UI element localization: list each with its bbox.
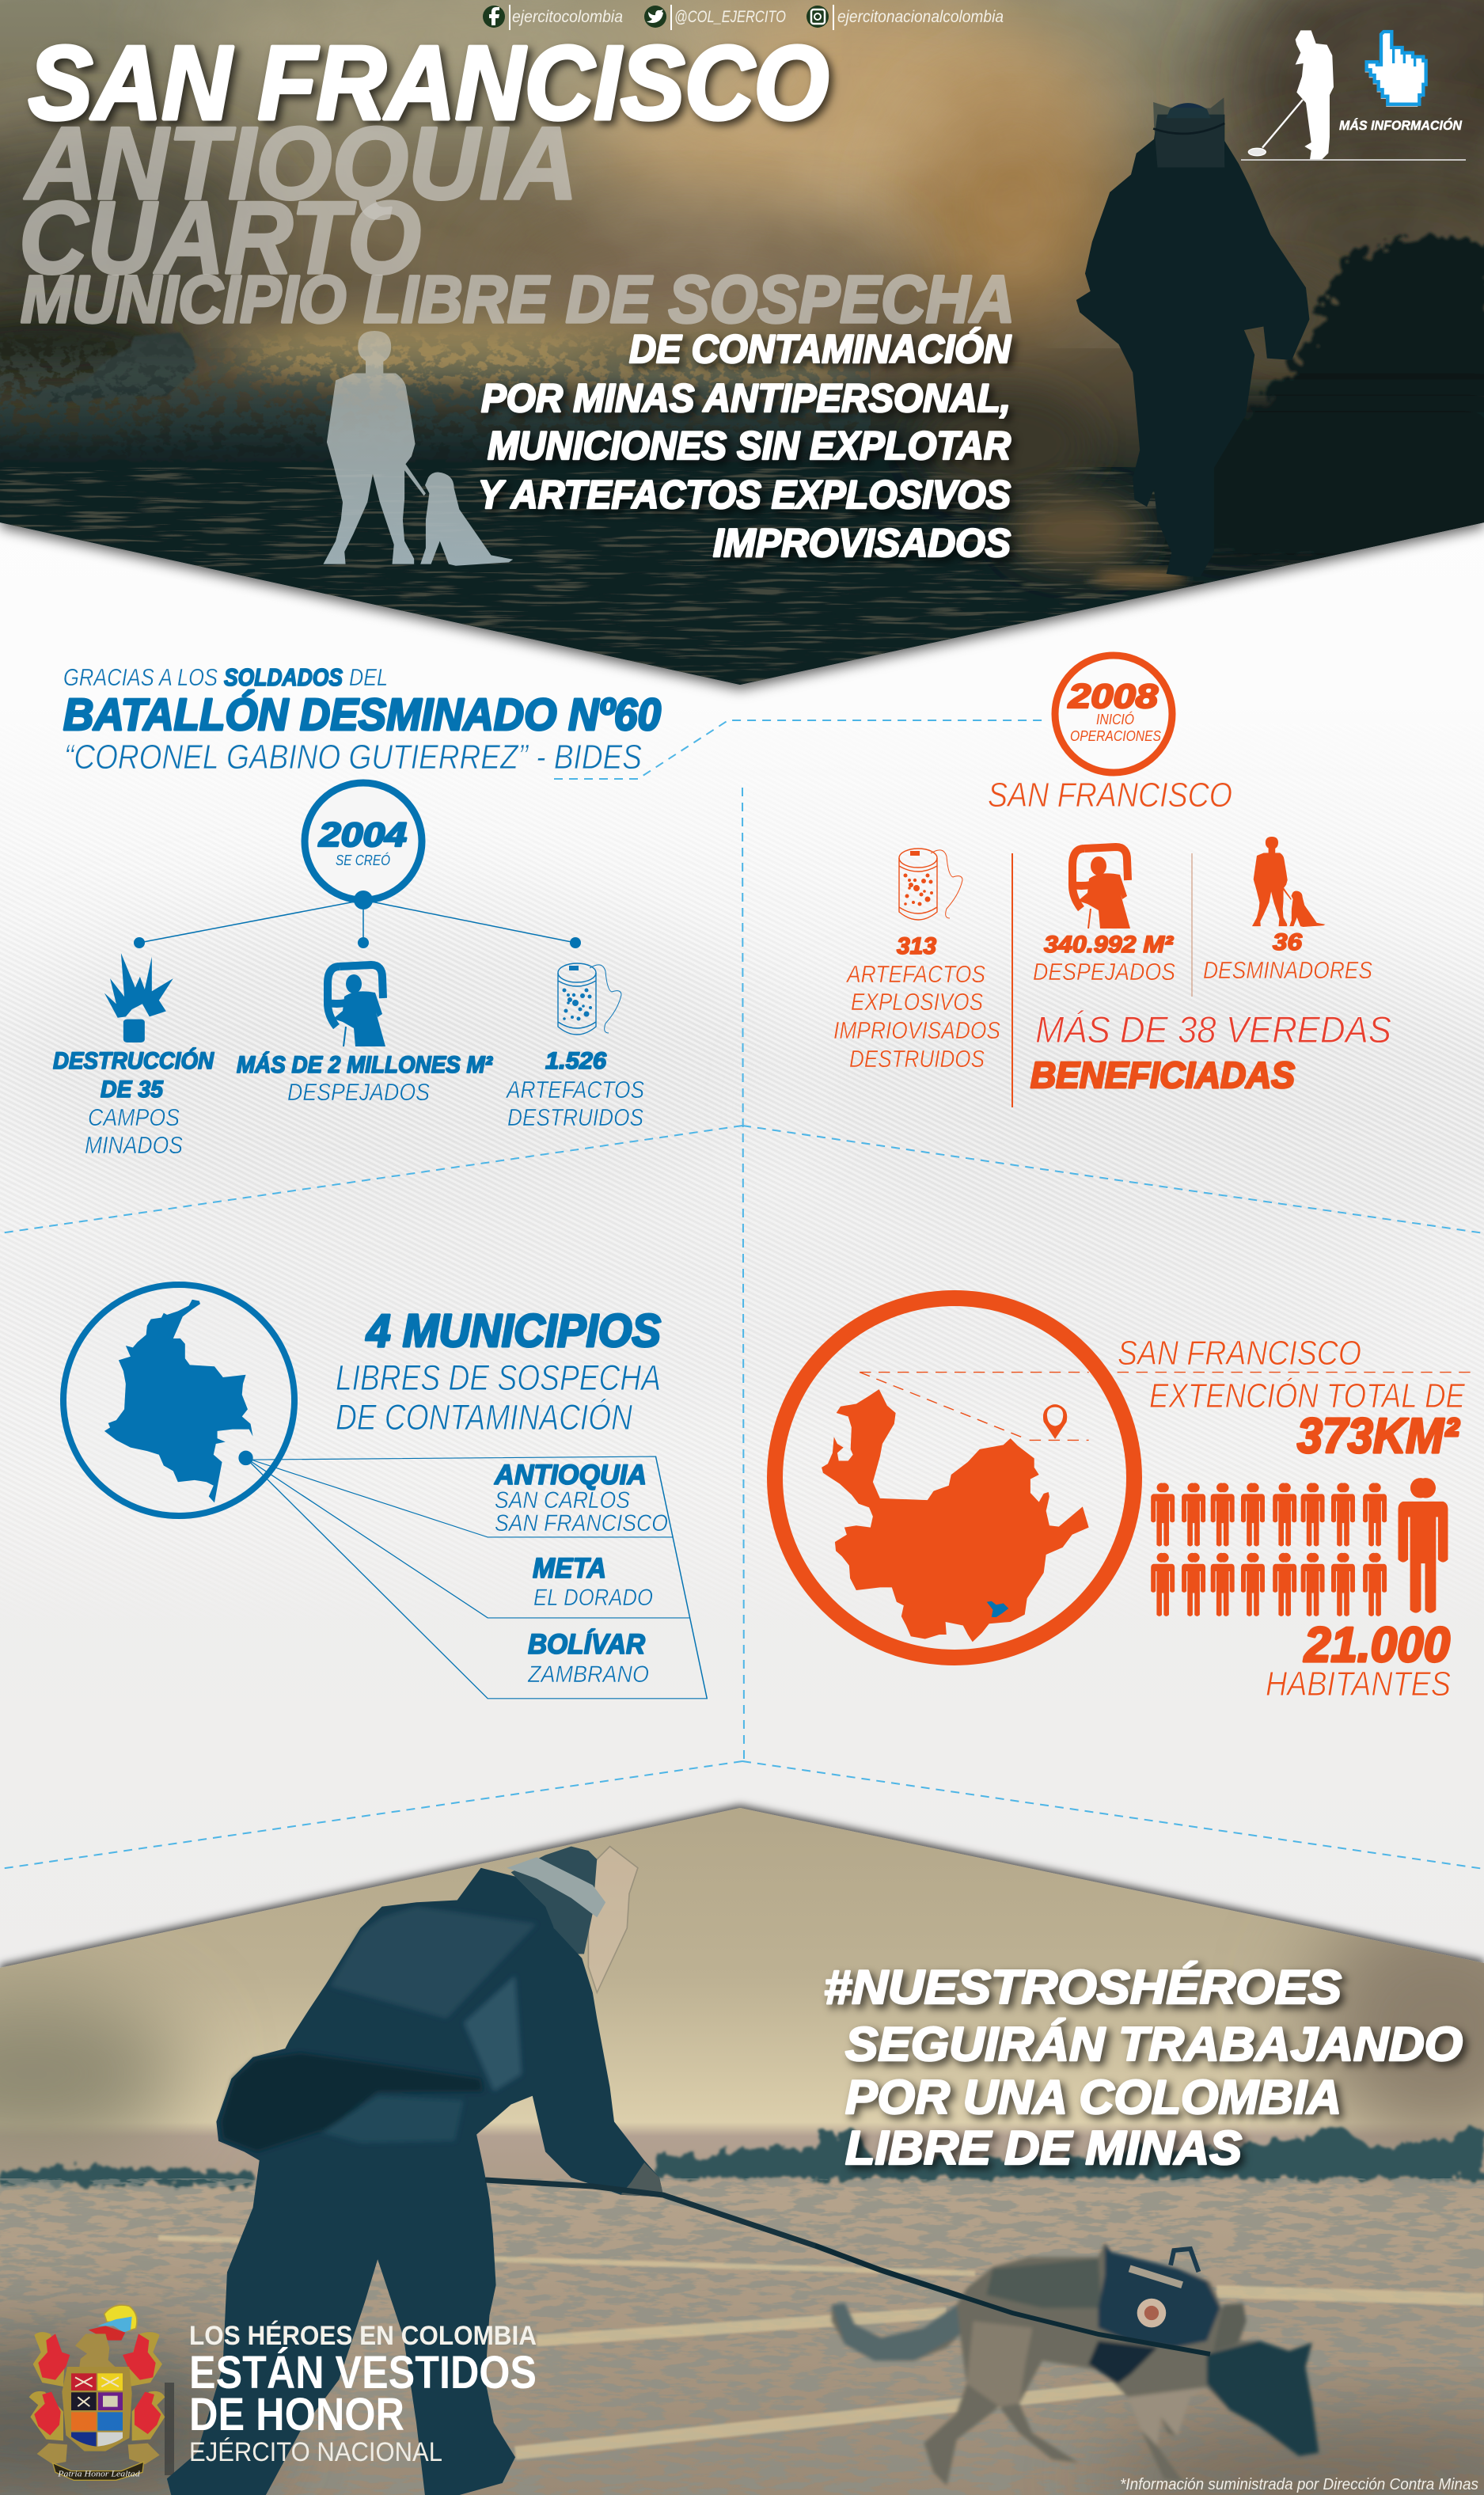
- text: extension: [1118, 1334, 1466, 1464]
- stat: 313: ARTEFACTOS: [845, 960, 985, 988]
- stat: campos minados: [53, 1047, 214, 1159]
- stat: 36: 36: [1273, 929, 1302, 955]
- panel: batallon heading: GRACIAS A LOS: [63, 663, 218, 691]
- icon: helmet man: [1072, 847, 1130, 929]
- closing message: POR UNA COLOMBIA: [845, 2071, 1342, 2124]
- mid haze around runner: [918, 388, 1092, 499]
- stat: 1.526: ARTEFACTOS: [505, 1076, 644, 1103]
- stat: dos millones: [237, 1051, 493, 1106]
- stat: dos millones: DESPEJADOS: [287, 1078, 430, 1106]
- leash over dog: [815, 2246, 1210, 2354]
- dust: [1009, 495, 1144, 566]
- list: Antioquia: [494, 1460, 668, 1536]
- grass: [0, 2178, 1484, 2495]
- map: Colombia in circle: [63, 1285, 294, 1516]
- subtitle block: [478, 327, 1011, 565]
- panel: bottom photo: [0, 1805, 1484, 2495]
- tank: [30, 332, 196, 403]
- icon: twitter: [644, 5, 672, 30]
- closing message: [824, 1961, 1463, 2174]
- crest ribbons: [37, 2444, 160, 2464]
- sunlit haze behind bushes: [230, 321, 657, 384]
- deminer silhouette: [1076, 97, 1309, 577]
- heading: san francisco: SAN FRANCISCO: [988, 776, 1232, 815]
- panel: batallon heading: BATALLÓN DESMINADO Nº60: [63, 689, 661, 740]
- main title: SAN FRANCISCO: [28, 25, 829, 141]
- callout: veredas: [1030, 1008, 1391, 1096]
- stat: 313: DESTRUIDOS: [849, 1045, 985, 1073]
- circle: 2008: [1055, 655, 1172, 773]
- list: Antioquia: SAN CARLOS: [495, 1487, 630, 1513]
- panel: San Francisco data: [775, 1298, 1475, 1703]
- panel: batallon heading: “CORONEL GABINO GUTIERREZ” - BIDES: [64, 738, 642, 777]
- panel: 2004 tree: [53, 783, 644, 1159]
- handle: instagram: ejercitonacionalcolombia: [837, 8, 1004, 26]
- stat: campos minados: MINADOS: [85, 1131, 183, 1159]
- callout: veredas: BENEFICIADAS: [1030, 1054, 1295, 1096]
- footer slogan: [189, 2321, 537, 2467]
- crest shield: [62, 2367, 132, 2451]
- panel: 2008 operaciones: [833, 655, 1391, 1107]
- subtitle block: DE CONTAMINACIÓN: [629, 327, 1011, 371]
- stat: 1.526: DESTRUIDOS: [507, 1103, 643, 1131]
- text: extension: SAN FRANCISCO: [1118, 1334, 1361, 1373]
- stat: 313: IMPRIOVISADOS: [833, 1016, 1000, 1044]
- icon: army crest: [29, 2305, 165, 2480]
- stat: dos millones: MÁS DE 2 MILLONES M²: [237, 1051, 493, 1078]
- list: Bolivar: BOLÍVAR: [528, 1629, 646, 1660]
- panel: 4 municipios: [63, 1285, 707, 1699]
- subtitle block: POR MINAS ANTIPERSONAL,: [481, 376, 1011, 420]
- list: Antioquia: ANTIOQUIA: [494, 1460, 647, 1491]
- callout: veredas: MÁS DE 38 VEREDAS: [1035, 1008, 1391, 1050]
- map: Antioquia in circle: [775, 1298, 1134, 1658]
- heading: 4 municipios: DE CONTAMINACIÓN: [336, 1397, 632, 1437]
- closing message: #NUESTROSHÉROES: [824, 1961, 1342, 2014]
- panel: top hero photo: [0, 0, 1484, 697]
- list: Antioquia: SAN FRANCISCO: [495, 1510, 668, 1536]
- icon: mine: [899, 849, 962, 920]
- foliage: [0, 336, 871, 462]
- icon: helmet man: [328, 965, 385, 1046]
- text: population: HABITANTES: [1266, 1665, 1451, 1703]
- stat: campos minados: DESTRUCCIÓN: [53, 1047, 214, 1074]
- icon: pointer hand: [1365, 32, 1426, 107]
- right bush: [1235, 236, 1484, 554]
- stat: 36: [1203, 929, 1372, 984]
- leash: [485, 2180, 1210, 2354]
- icon: map pin: [1043, 1404, 1067, 1439]
- subtitle block: IMPROVISADOS: [713, 521, 1011, 565]
- stat: 1.526: [505, 1048, 644, 1131]
- text: population: 21.000: [1304, 1618, 1450, 1673]
- footer slogan: LOS HÉROES EN COLOMBIA: [189, 2321, 537, 2351]
- handle: twitter: @COL_EJERCITO: [674, 8, 786, 26]
- icon: mine: [558, 963, 621, 1035]
- stat: 313: 313: [897, 933, 936, 959]
- icon: facebook: [483, 5, 510, 30]
- circle: 2004: [305, 783, 422, 900]
- heading: 4 municipios: 4 MUNICIPIOS: [366, 1305, 661, 1357]
- subtitle block: Y ARTEFACTOS EXPLOSIVOS: [478, 473, 1011, 517]
- subtitle block: MUNICIONES SIN EXPLOTAR: [488, 423, 1011, 468]
- stat: 1.526: 1.526: [545, 1048, 606, 1074]
- list: Meta: EL DORADO: [533, 1585, 653, 1611]
- stat: 36: DESMINADORES: [1203, 956, 1372, 984]
- list: Bolivar: [527, 1629, 649, 1688]
- circle: 2008: INICIÓ: [1096, 711, 1134, 727]
- icon: ghost soldier with dog: [323, 331, 513, 566]
- icon: instagram: [807, 5, 834, 30]
- heading: 4 municipios: [336, 1305, 661, 1437]
- footer slogan: DE HONOR: [189, 2389, 404, 2440]
- stat: 340.992: DESPEJADOS: [1033, 958, 1175, 985]
- text: extension: 373KM²: [1297, 1409, 1459, 1464]
- footer slogan: EJÉRCITO NACIONAL: [189, 2437, 442, 2467]
- list: Meta: META: [533, 1553, 606, 1584]
- dashed connector lines: [0, 720, 1484, 1869]
- circle: 2004: SE CREÓ: [336, 852, 390, 868]
- footer slogan: ESTÁN VESTIDOS: [189, 2347, 537, 2398]
- social media bar: [483, 5, 1004, 30]
- crest mantling: [29, 2332, 165, 2440]
- icon: deminer with detector: [1248, 30, 1334, 160]
- connector tree: [134, 891, 581, 948]
- page background: [0, 522, 1484, 1355]
- closing message: LIBRE DE MINAS: [845, 2121, 1242, 2174]
- stat: 313: [833, 933, 1000, 1073]
- crest helmet: [75, 2334, 117, 2369]
- panel: batallon heading: SOLDADOS: [224, 663, 343, 691]
- soldier photo figure: [167, 1847, 663, 2495]
- title: municipio libre de sospecha: MUNICIPIO LIBRE DE SOSPECHA: [21, 262, 1015, 336]
- pictogram: population: [1151, 1478, 1448, 1616]
- handle: facebook: ejercitocolombia: [512, 8, 623, 26]
- panel: batallon heading: [63, 663, 661, 777]
- heading: 4 municipios: LIBRES DE SOSPECHA: [336, 1358, 661, 1398]
- icon: explosion: [104, 953, 173, 1042]
- label: MÁS INFORMACIÓN: [1339, 118, 1463, 133]
- closing message: SEGUIRÁN TRABAJANDO: [845, 2018, 1463, 2071]
- more information button: [1241, 30, 1466, 161]
- dog photo figure: [832, 2242, 1319, 2486]
- panel: batallon heading: DEL: [349, 663, 388, 691]
- list: Bolivar: ZAMBRANO: [527, 1661, 649, 1688]
- stat: 340.992: [1033, 932, 1175, 985]
- callout lines: [239, 1451, 707, 1699]
- text: population: [1266, 1618, 1451, 1703]
- circle: 2008: 2008: [1068, 678, 1158, 716]
- stat: 313: EXPLOSIVOS: [851, 988, 983, 1016]
- stat: campos minados: CAMPOS: [88, 1103, 180, 1131]
- post: [165, 2383, 174, 2475]
- list: Meta: [533, 1553, 653, 1611]
- stat: 340.992: 340.992 M²: [1044, 932, 1174, 958]
- dashed pointer: [860, 1373, 1475, 1440]
- circle: 2008: OPERACIONES: [1070, 728, 1161, 744]
- stat: campos minados: DE 35: [101, 1077, 164, 1103]
- title: Cuarto: CUARTO: [19, 180, 421, 295]
- tapes: [158, 2238, 1484, 2453]
- icon: soldier and dog: [1252, 837, 1325, 927]
- crest motto: Patria Honor Lealtad: [57, 2470, 141, 2478]
- crest plume: [104, 2305, 137, 2331]
- tree line: [0, 2128, 1484, 2186]
- circle: 2004: 2004: [318, 816, 407, 854]
- title: Antioquia: ANTIOQUIA: [24, 105, 578, 221]
